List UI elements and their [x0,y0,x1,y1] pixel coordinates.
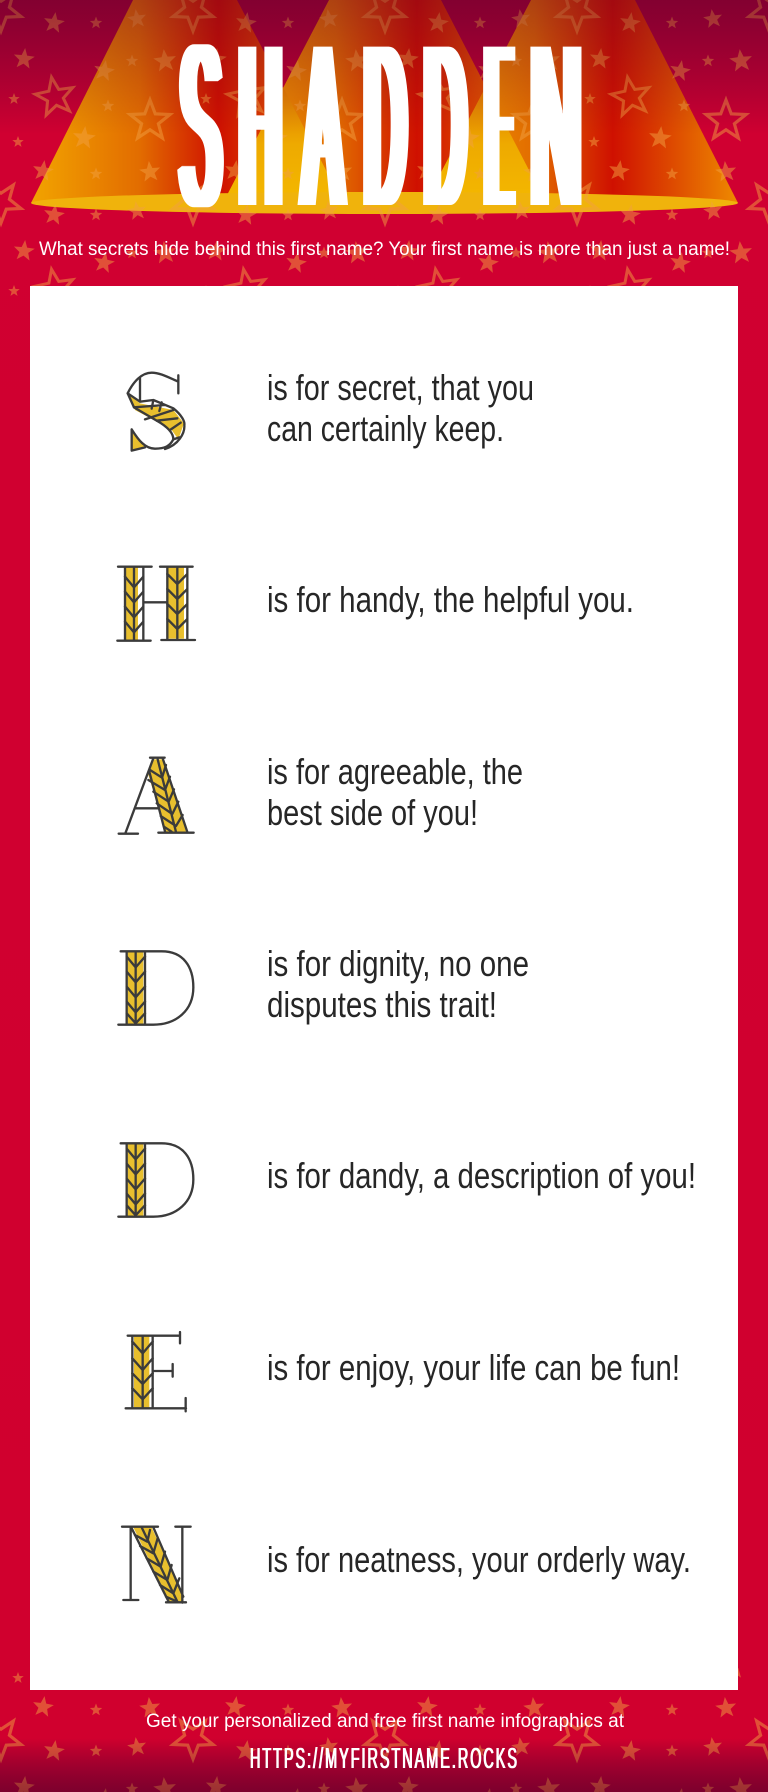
title: D [365,0,405,258]
title: N [531,0,581,257]
icon: letter S [128,373,184,451]
footer call to action: Get your personalized and free first name infographics at [146,1711,625,1732]
spotlights [31,0,738,214]
star pattern top [0,0,768,302]
title: E [487,0,511,257]
text: S line: is for secret, that you [267,367,534,408]
title [181,0,581,258]
title: A [304,0,342,258]
title: H [240,0,281,258]
icon: letter A [119,758,194,834]
text: H line: is for handy, the helpful you. [267,579,634,620]
title: D [425,0,465,258]
subtitle: What secrets hide behind this first name? Your first name is more than just a name! [39,239,730,260]
icon: letter D [118,1143,193,1217]
icon: letter D [118,951,193,1025]
text: D line [267,943,529,1025]
text: S line [267,367,534,449]
icon: letter H [117,567,195,641]
text: S line: can certainly keep. [267,408,504,449]
star pattern bottom [0,1668,768,1792]
icon: letter E [126,1332,186,1411]
text: A line: best side of you! [267,792,478,833]
text: A line: is for agreeable, the [267,751,523,792]
white panel [30,286,738,1690]
icon: letter N [122,1527,191,1603]
text: D line: disputes this trait! [267,984,497,1025]
title: S [181,0,220,258]
text: D line: is for dignity, no one [267,943,529,984]
text: A line [267,751,523,833]
text: E line: is for enjoy, your life can be fun! [267,1347,680,1388]
